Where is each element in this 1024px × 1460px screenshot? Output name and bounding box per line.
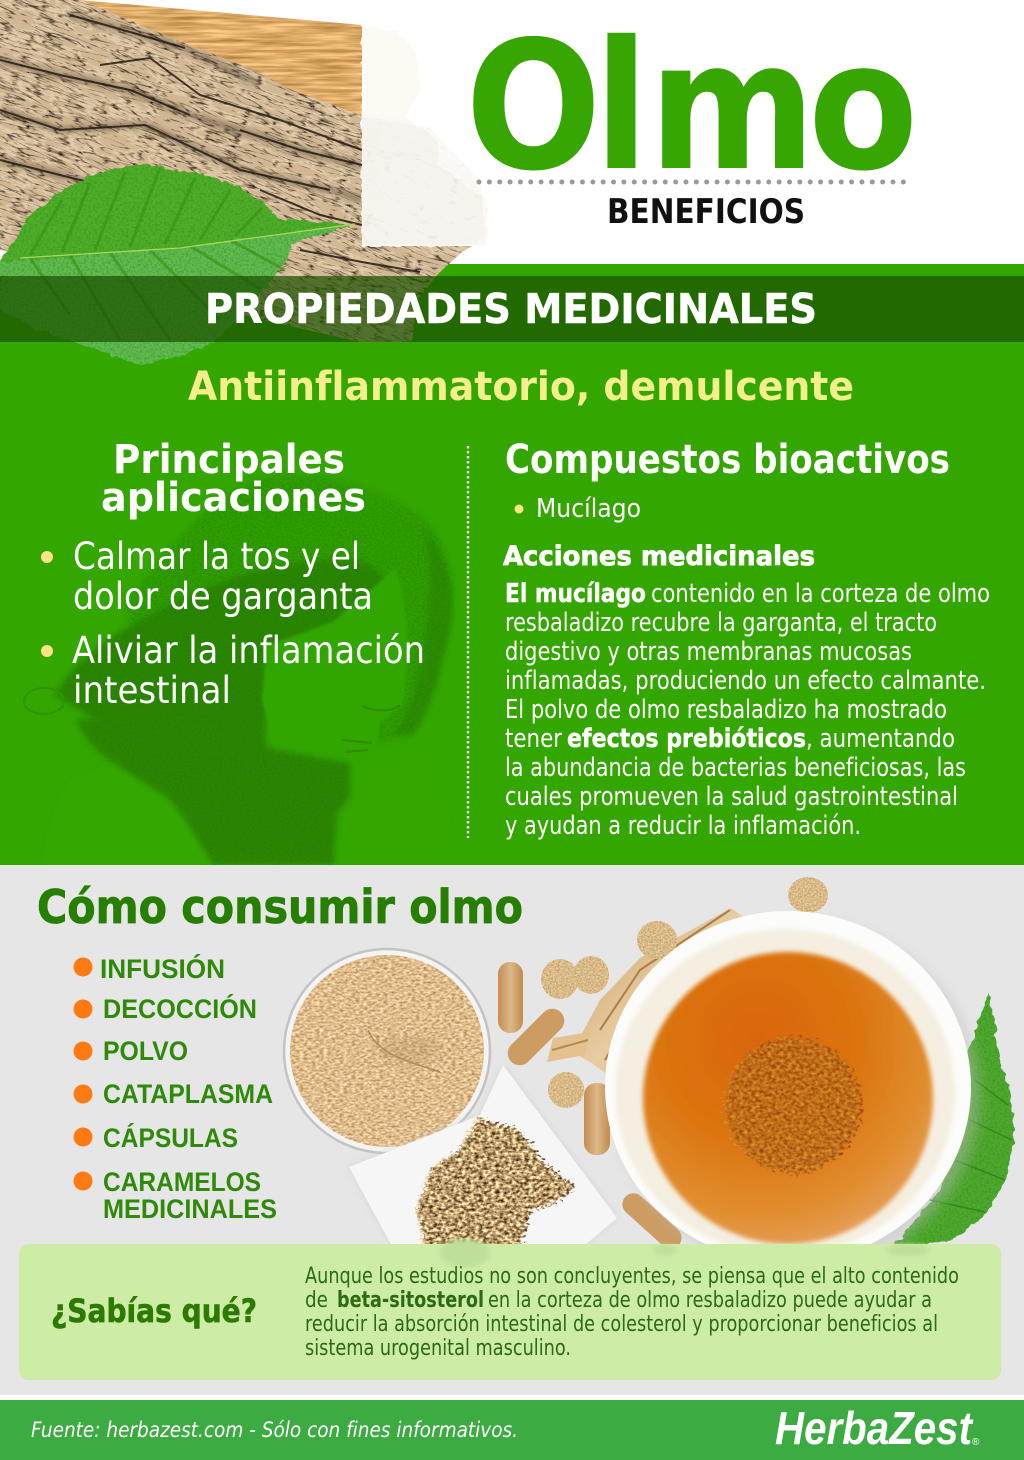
hand: [340, 737, 449, 865]
list: applications: intestinal: [73, 669, 231, 712]
steeped herbs: [725, 1037, 861, 1173]
heading: propiedades medicinales: PROPIEDADES MEDICINALES: [205, 285, 817, 333]
capsule 3: [584, 1083, 610, 1155]
text block: medicinal actions: y ayudan a reducir la inflamación.: [505, 811, 861, 841]
hair, outer: [125, 476, 452, 742]
list: forms of use: MEDICINALES: [103, 1194, 277, 1224]
capsule 2: [508, 1008, 564, 1066]
leaf behind bowl: [892, 993, 1014, 1248]
text block: medicinal actions: El mucílago: [505, 579, 646, 609]
divider: column separator: [467, 446, 469, 838]
logo: herbazest: HerbaZest: [775, 1402, 973, 1454]
list: forms of use: POLVO: [103, 1036, 188, 1066]
image: woman coughing: [24, 476, 452, 865]
text block: medicinal actions: , aumentando: [806, 724, 955, 754]
title: olmo: Olmo: [465, 3, 918, 210]
cloth: [349, 1065, 617, 1250]
list: forms of use: CATAPLASMA: [103, 1079, 273, 1109]
tea: [643, 952, 933, 1244]
list: forms of use: DECOCCIÓN: [103, 993, 257, 1024]
callout text: de: [305, 1288, 328, 1313]
panel: how to consume background: [0, 865, 1024, 1395]
callout text: sistema urogenital masculino.: [305, 1336, 571, 1361]
bark stick: [547, 908, 745, 1085]
bowl: [605, 911, 971, 1263]
list: forms of use: CÁPSULAS: [103, 1122, 238, 1153]
callout text: beta-sitosterol: [337, 1288, 484, 1313]
dotted rule: [479, 180, 905, 184]
image: elm products: [284, 877, 1014, 1271]
hair curl: [24, 688, 64, 714]
capsule 1: [498, 962, 523, 1033]
list: forms of use: CARAMELOS: [103, 1167, 261, 1197]
text block: medicinal actions: digestivo y otras membranas mucosas: [505, 637, 912, 667]
body and coat: [43, 763, 213, 865]
face: [262, 568, 407, 772]
herb pile: [416, 1118, 575, 1250]
list: forms of use: [74, 953, 277, 1224]
compound item: Mucílago: [536, 494, 641, 524]
lips and nose: [342, 705, 400, 752]
panel: medicinal properties background: [0, 264, 1024, 865]
source note: Fuente: herbazest.com - Sólo con fines informativos.: [31, 1418, 518, 1442]
hair, dark mass: [55, 558, 388, 752]
text block: medicinal actions: tener: [505, 724, 562, 754]
list: applications: Aliviar la inflamación: [72, 629, 425, 672]
callout shadow marks: [440, 1239, 930, 1267]
heading: compuestos bioactivos: Compuestos bioactivos: [505, 437, 950, 483]
heading: como consumir olmo: Cómo consumir olmo: [37, 880, 523, 934]
list: applications: Calmar la tos y el: [73, 535, 360, 578]
bowl shadow: [640, 959, 986, 1244]
callout heading: ¿Sabías qué?: [51, 1292, 257, 1330]
callout: did you know: [19, 1239, 1001, 1380]
heading: principales aplicaciones: [101, 437, 366, 521]
column: compounds: [503, 437, 990, 841]
band: section heading background: [0, 276, 1024, 342]
text block: medicinal actions: efectos prebióticos: [567, 724, 806, 754]
capsule 4: [622, 1193, 682, 1244]
list: forms of use: INFUSIÓN: [100, 953, 225, 984]
subheading: antiinflamatorio, demulcente: Antiinflammatorio, demulcente: [188, 364, 854, 410]
heading: principales aplicaciones: aplicaciones: [101, 475, 366, 521]
heading: principales aplicaciones: Principales: [113, 437, 345, 483]
hair, right strand: [392, 530, 452, 735]
image: elm leaf, top: [0, 163, 355, 365]
petri dish with powder: [284, 949, 490, 1153]
image: elm bark: [0, 0, 488, 342]
footer: [0, 1400, 1024, 1460]
scarf: [77, 707, 350, 865]
heading: acciones medicinales: Acciones medicinales: [503, 541, 815, 572]
callout text: en la corteza de olmo resbaladizo puede ayudar a: [488, 1288, 932, 1313]
logo: herbazest: ®: [972, 1437, 980, 1448]
subtitle: beneficios: BENEFICIOS: [607, 192, 805, 232]
tablets: [541, 877, 828, 1108]
list: applications: [41, 535, 425, 712]
list: applications: dolor de garganta: [73, 575, 373, 618]
column: applications: [41, 437, 425, 712]
callout text: [305, 1264, 959, 1361]
text block: medicinal actions: [505, 579, 990, 841]
faded right end of bark: [360, 25, 488, 248]
title block: [465, 3, 918, 232]
